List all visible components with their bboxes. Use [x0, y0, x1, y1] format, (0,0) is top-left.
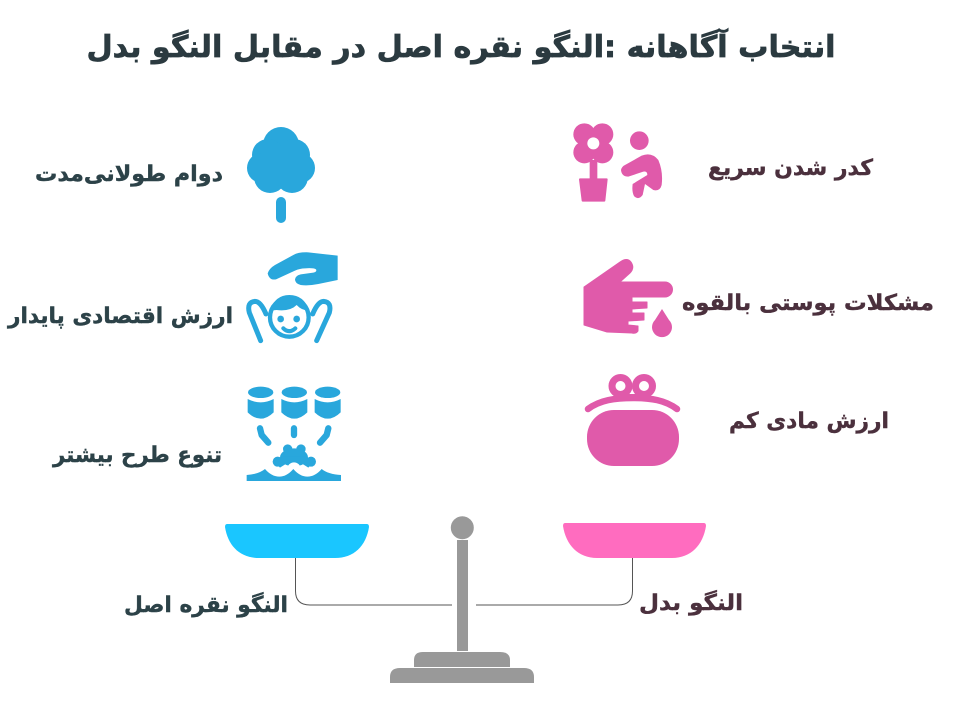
icon: cylinders and gear: [247, 387, 341, 481]
icon: wilted flower and person: [573, 123, 662, 201]
label: imitation bangle: النگو بدل: [639, 589, 743, 616]
chart: balance scale: [225, 516, 706, 683]
icon: coin purse: [587, 378, 679, 466]
label: genuine silver bangle: النگو نقره اصل: [124, 591, 288, 618]
label: sustainable economic value: ارزش اقتصادی پایدار: [7, 304, 233, 329]
icon: pointing hand with drop: [584, 260, 673, 337]
icon: tree: [247, 127, 315, 223]
pink pan: [563, 523, 706, 558]
label: quick tarnishing: کدر شدن سریع: [708, 156, 873, 181]
icon: hand over child: [249, 252, 338, 341]
label: long-term durability: دوام طولانی‌مدت: [35, 162, 223, 187]
label: more design variety: تنوع طرح بیشتر: [52, 443, 222, 468]
blue pan: [225, 524, 369, 558]
title: انتخاب آگاهانه :النگو نقره اصل در مقابل النگو بدل: [86, 28, 836, 65]
label: low material value: ارزش مادی کم: [729, 409, 889, 434]
label: potential skin problems: مشکلات پوستی بالقوه: [682, 291, 934, 316]
